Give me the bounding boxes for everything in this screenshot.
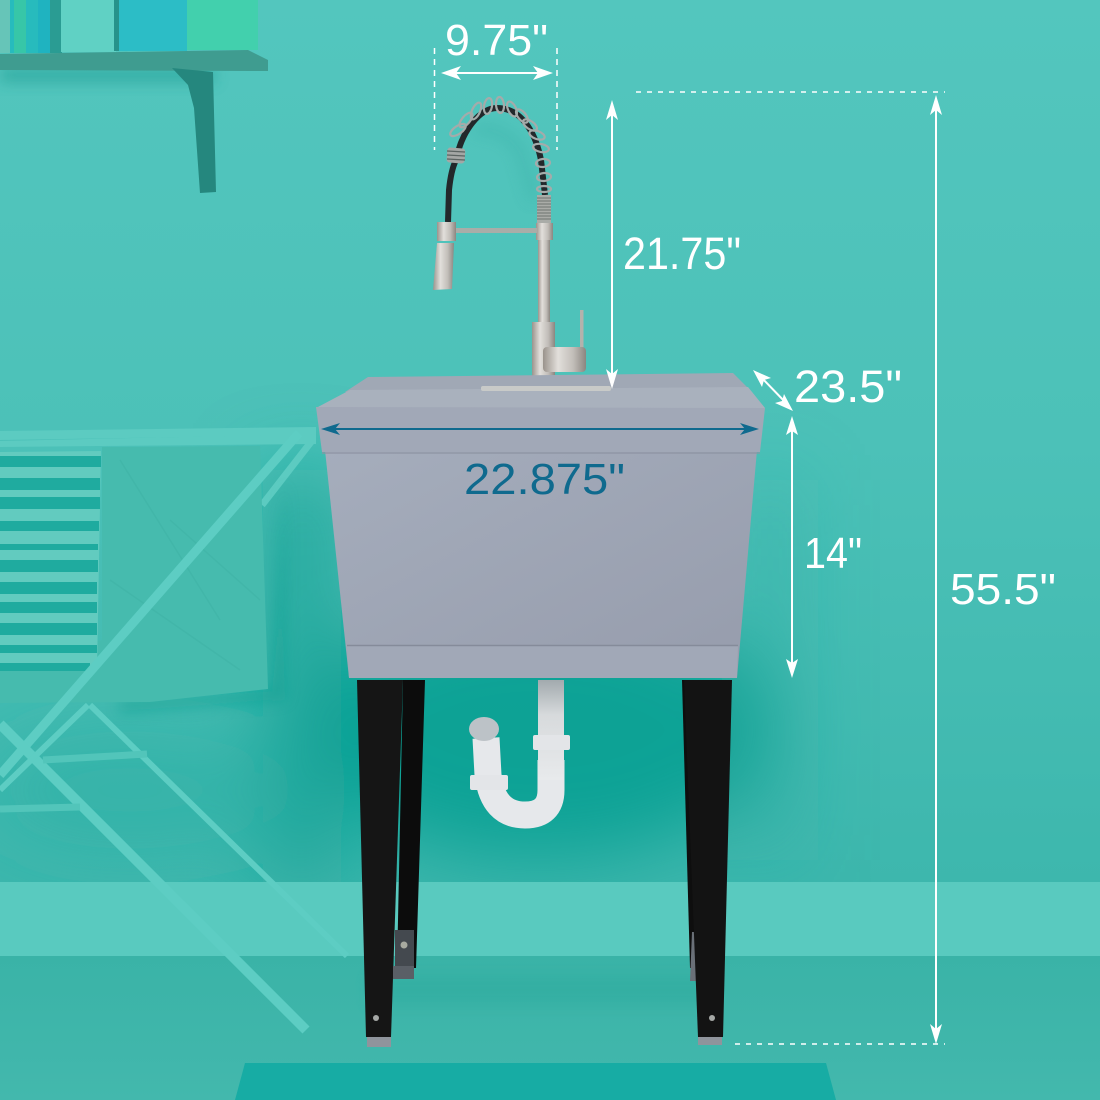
dimension: faucet reach 9.75 inches xyxy=(434,16,557,150)
rim lower edge xyxy=(322,452,760,454)
dimension: basin height 14 inches xyxy=(786,416,862,678)
rack legs xyxy=(0,433,347,1030)
faucet xyxy=(433,97,586,388)
basin interior xyxy=(316,387,765,408)
rug xyxy=(235,1063,836,1100)
basin rim xyxy=(316,407,765,452)
lower spring xyxy=(537,195,551,223)
drain p-trap xyxy=(469,680,570,815)
dashed extents xyxy=(636,92,945,1044)
dashed extents xyxy=(434,48,557,150)
faucet handle xyxy=(543,310,586,372)
striped towel xyxy=(0,451,101,671)
floor xyxy=(0,956,1100,1100)
shelf shadow xyxy=(0,68,215,82)
label 23.5: 23.5" xyxy=(794,361,902,412)
label 21.75: 21.75" xyxy=(623,228,741,279)
top arrowhead xyxy=(606,100,618,120)
spray head xyxy=(433,222,456,290)
label 55.5: 55.5" xyxy=(950,565,1056,614)
sheet fold shading xyxy=(110,460,260,670)
tailpiece xyxy=(538,680,564,780)
rack back strut xyxy=(262,442,311,505)
shelf with bottles xyxy=(0,0,268,193)
label 9.75: 9.75" xyxy=(445,16,548,65)
faucet shadow xyxy=(475,129,535,200)
shelf plank xyxy=(0,50,268,71)
sink xyxy=(316,373,765,1047)
faucet body xyxy=(532,322,555,388)
sheet shadow xyxy=(120,480,285,712)
spray arm xyxy=(456,228,537,233)
dimension: sink width 22.875 inches xyxy=(321,423,759,504)
bottom arrowhead xyxy=(606,369,618,389)
right foot xyxy=(698,1037,722,1045)
label 14: 14" xyxy=(804,529,862,578)
faucet stem xyxy=(538,240,550,324)
reach arrow xyxy=(441,66,553,80)
dimension: depth 23.5 inches xyxy=(753,361,902,412)
left bracket xyxy=(395,930,414,970)
right screw xyxy=(709,1015,715,1021)
left foot xyxy=(367,1037,391,1047)
rack front rail xyxy=(0,434,316,447)
right leg xyxy=(682,680,732,1045)
pipe nuts xyxy=(533,735,570,750)
bottles xyxy=(0,0,258,53)
wall shadow behind sink xyxy=(0,470,795,890)
bottom strip xyxy=(347,646,738,678)
dimension: faucet height 21.75 inches xyxy=(606,100,741,389)
drain plate xyxy=(481,386,611,391)
coil collar near hose xyxy=(446,147,466,164)
floor shadow xyxy=(370,975,710,1005)
baseboard xyxy=(0,882,1100,956)
bed sheet xyxy=(0,446,268,703)
basin body xyxy=(325,450,757,678)
left leg xyxy=(357,680,425,1047)
stem collar xyxy=(536,223,553,240)
drying rack with towels xyxy=(0,427,347,1030)
left screw xyxy=(373,1015,379,1021)
spring coil xyxy=(448,97,551,192)
rack back rail xyxy=(0,427,316,440)
shelf bracket xyxy=(172,68,216,193)
black hose xyxy=(448,108,545,222)
basin back ledge xyxy=(345,373,750,392)
dimension: total height 55.5 inches xyxy=(636,92,1056,1044)
sink legs xyxy=(357,680,732,1047)
label 22.875: 22.875" xyxy=(464,455,625,504)
